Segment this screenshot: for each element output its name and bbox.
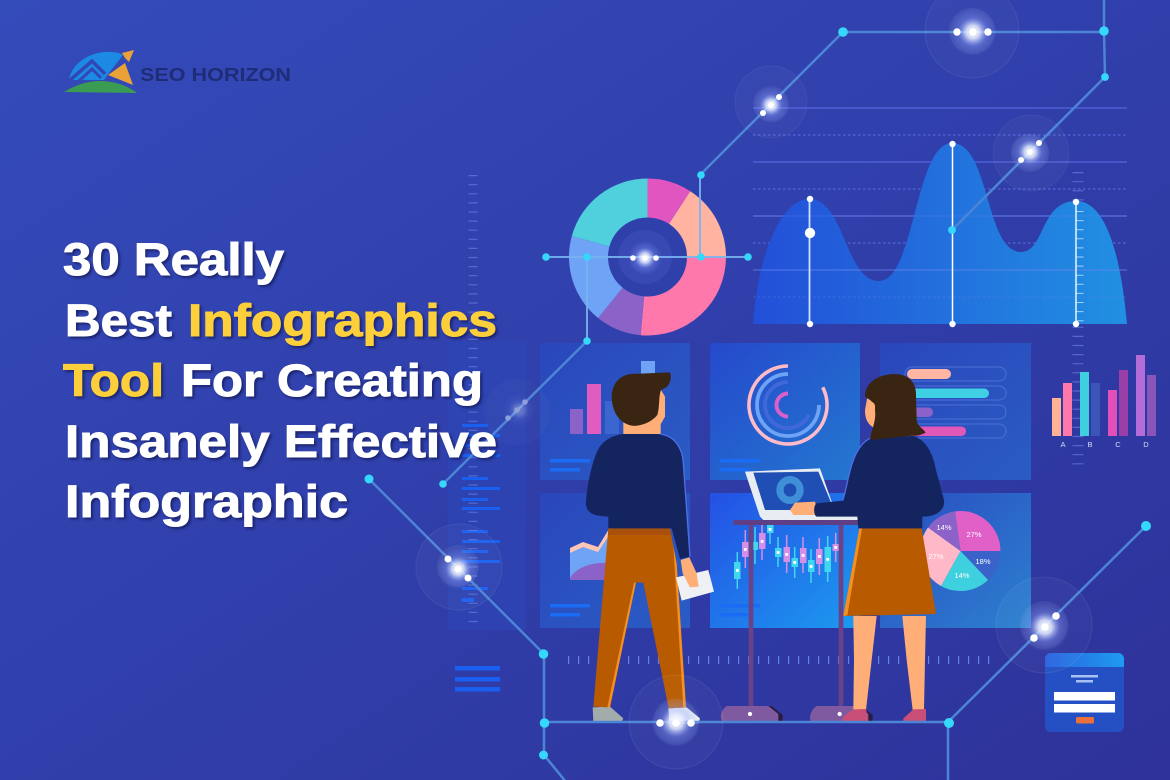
desk with laptop	[721, 468, 873, 722]
title: Best	[65, 295, 172, 346]
glow node: bottom centre	[629, 675, 723, 769]
bar chart: A B C D: B	[1087, 440, 1093, 449]
figure: man	[586, 372, 714, 723]
stacked bars bottom left	[455, 666, 500, 692]
bar chart: A B C D: A	[1060, 440, 1066, 449]
title: Infographics	[188, 295, 497, 346]
glow node: lower left	[416, 524, 502, 610]
glow node: upper left	[735, 66, 807, 138]
title: Insanely Effective	[65, 416, 497, 467]
network lines	[369, 0, 1146, 780]
panel: pie chart tile: 14%	[936, 523, 952, 532]
glow node: upper right	[993, 115, 1069, 191]
panel: candlestick chart tile	[710, 493, 860, 628]
tick column right	[1072, 172, 1084, 470]
title	[63, 234, 497, 527]
glow node: donut centre	[628, 241, 662, 275]
panel: pie chart tile: 27%	[928, 552, 944, 561]
glow node: lower right	[996, 577, 1092, 673]
network nodes: cyan dots	[364, 26, 1151, 759]
title: For Creating	[181, 355, 483, 406]
donut chart	[569, 178, 726, 335]
title: 30 Really	[63, 234, 284, 285]
ruler ticks	[568, 656, 992, 664]
bar chart: A B C D: C	[1115, 440, 1121, 449]
panel: pie chart tile: 27%	[966, 530, 982, 539]
panel: area chart tile	[540, 493, 690, 628]
faint left column panel	[448, 341, 526, 630]
panel: radial chart tile	[710, 343, 860, 480]
laptop	[745, 468, 858, 520]
panel: pie chart tile	[880, 493, 1031, 628]
tick column left	[468, 175, 478, 628]
area chart: blue mountains	[753, 141, 1127, 327]
title: Infographic	[65, 476, 348, 527]
bar chart: A B C D: D	[1143, 440, 1149, 449]
panel: horizontal bars tile	[880, 343, 1031, 480]
figure: woman	[790, 374, 944, 722]
chart grid lines	[753, 108, 1127, 243]
glow node: faded centre left	[484, 379, 550, 445]
form card	[1045, 653, 1124, 732]
desk	[721, 520, 873, 722]
title: Tool	[63, 355, 164, 406]
bar chart: A B C D	[1052, 355, 1156, 449]
logo: SEO Horizon: SEO HORIZON	[140, 65, 291, 85]
panel: pie chart tile: 14%	[954, 571, 970, 580]
panel: pie chart tile: 18%	[975, 557, 991, 566]
glow node: top	[925, 0, 1019, 78]
panel: bar chart tile	[540, 343, 690, 480]
logo: SEO Horizon	[64, 50, 291, 93]
